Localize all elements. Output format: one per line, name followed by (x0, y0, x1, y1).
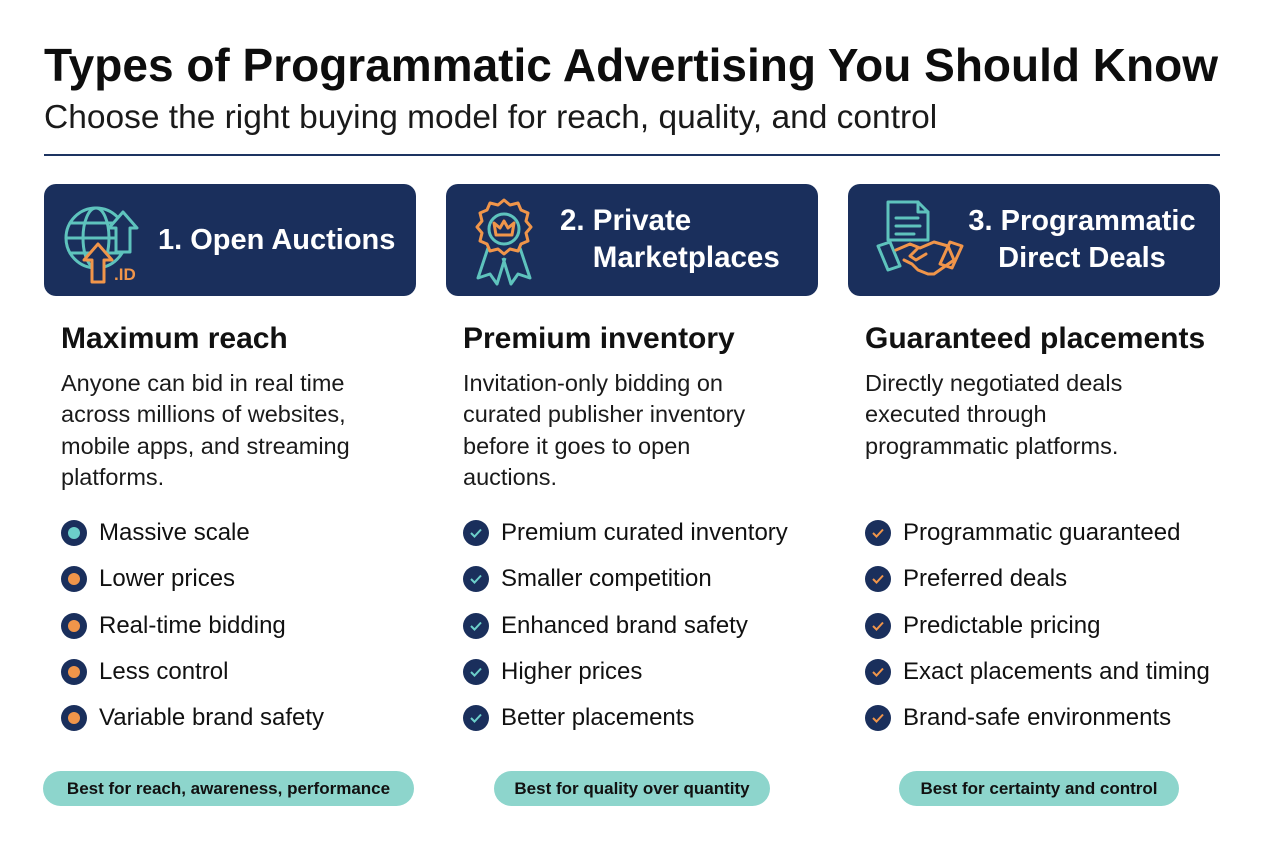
description: Anyone can bid in real time across millions of websites, mobile apps, and streaming platforms. (61, 370, 350, 490)
text: Enhanced brand safety (501, 612, 748, 639)
text: Real-time bidding (99, 612, 286, 639)
header: private marketplaces (446, 184, 818, 296)
header: programmatic direct deals: 3. Programmatic (968, 205, 1196, 237)
text: Programmatic guaranteed (903, 519, 1180, 546)
text: Variable brand safety (99, 704, 324, 731)
text: Predictable pricing (903, 612, 1100, 639)
pill: direct deals: Best for certainty and control (920, 778, 1158, 798)
icon: globe with arrows: .ID (114, 265, 136, 284)
text: Higher prices (501, 658, 642, 685)
header: open auctions: 1. Open Auctions (158, 224, 395, 256)
title: Types of Programmatic Advertising You Should Know (44, 39, 1218, 91)
text: Less control (99, 658, 228, 685)
text: Smaller competition (501, 565, 712, 592)
header: open auctions (44, 184, 416, 296)
icon: contract handshake (876, 200, 964, 276)
text: Massive scale (99, 519, 250, 546)
subheading: Guaranteed placements (865, 322, 1205, 355)
description: Directly negotiated deals executed through programmatic platforms. (865, 370, 1122, 459)
column: open auctions (61, 322, 350, 731)
pill: private marketplaces: Best for quality over quantity (514, 778, 750, 798)
pill: direct deals (899, 771, 1179, 806)
subheading: Maximum reach (61, 322, 288, 355)
text: Brand-safe environments (903, 704, 1171, 731)
description: Invitation-only bidding on curated publisher inventory before it goes to open auctions. (463, 370, 745, 490)
subtitle: Choose the right buying model for reach, quality, and control (44, 99, 937, 136)
header: private marketplaces: 2. Private (560, 204, 691, 237)
text: Premium curated inventory (501, 519, 788, 546)
text: Exact placements and timing (903, 658, 1210, 685)
bullets (463, 519, 788, 731)
pill: open auctions (43, 771, 414, 806)
text: Preferred deals (903, 565, 1067, 592)
icon: globe with arrows (64, 206, 138, 284)
subheading: Premium inventory (463, 322, 735, 355)
header: programmatic direct deals: Direct Deals (998, 242, 1166, 274)
bullets (865, 519, 1210, 731)
bullets (61, 519, 324, 731)
pill: open auctions: Best for reach, awareness, performance (67, 778, 390, 798)
text: Better placements (501, 704, 694, 731)
icon: award ribbon (476, 198, 532, 286)
header: programmatic direct deals (848, 184, 1220, 296)
pill: private marketplaces (494, 771, 770, 806)
header: private marketplaces: Marketplaces (593, 241, 780, 274)
text: Lower prices (99, 565, 235, 592)
column: direct deals (865, 322, 1210, 731)
column: private marketplaces (463, 322, 788, 731)
